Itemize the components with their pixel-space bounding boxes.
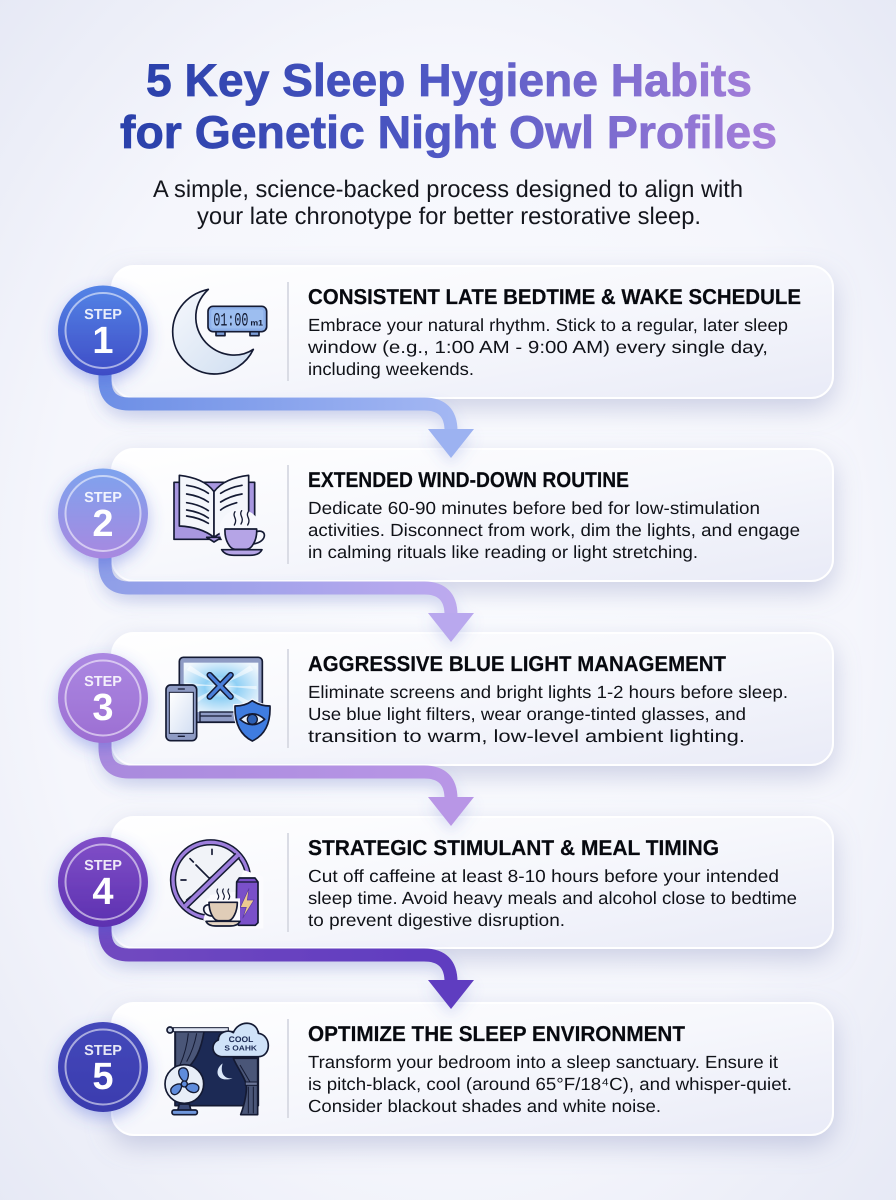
step 3 heading: AGGRESSIVE BLUE LIGHT MANAGEMENT <box>308 652 726 676</box>
panel: step 1 card <box>112 266 833 398</box>
step 4 description: to prevent digestive disruption. <box>308 910 565 930</box>
icon: bedroom window, fan and cool and dark cloud: COOL <box>229 1035 253 1044</box>
step 3 badge <box>58 653 148 743</box>
step 3 description <box>308 682 788 746</box>
step 2 description: in calming rituals like reading or light stretching. <box>308 542 698 562</box>
step 4 heading: STRATEGIC STIMULANT & MEAL TIMING <box>308 836 719 860</box>
arrow: step 3 to step 4 <box>105 737 474 826</box>
step 1 heading: CONSISTENT LATE BEDTIME & WAKE SCHEDULE <box>308 285 801 309</box>
step 5 description: is pitch-black, cool (around 65°F/18⁴C), and whisper-quiet. <box>308 1074 792 1094</box>
step 4 description: Cut off caffeine at least 8-10 hours before your intended <box>308 866 779 886</box>
step 1 badge: 1 <box>92 320 114 362</box>
step 1 description: window (e.g., 1:00 AM - 9:00 AM) every single day, <box>307 337 768 357</box>
step 4 badge: STEP <box>84 858 122 874</box>
step 3 description: Eliminate screens and bright lights 1-2 hours before sleep. <box>308 682 788 702</box>
step 5 description: Transform your bedroom into a sleep sanctuary. Ensure it <box>308 1052 778 1072</box>
subtitle <box>153 176 743 230</box>
step 1 badge <box>58 286 148 376</box>
step 5 heading: OPTIMIZE THE SLEEP ENVIRONMENT <box>308 1022 685 1046</box>
step 1 description <box>307 315 788 379</box>
step 2 description <box>308 498 800 562</box>
icon: bedroom window, fan and cool and dark cloud <box>165 1023 268 1115</box>
step 1 badge: STEP <box>84 307 122 323</box>
arrow: step 2 to step 3 <box>105 553 474 642</box>
step 5 description <box>308 1052 792 1116</box>
arrow: step 4 to step 5 <box>105 921 474 1009</box>
step 4 badge: 4 <box>92 871 114 913</box>
title: 5 Key Sleep Hygiene Habits <box>146 54 752 106</box>
arrow: step 1 to step 2 <box>105 370 474 458</box>
panel: step 2 card <box>112 449 833 581</box>
step 2 heading: EXTENDED WIND-DOWN ROUTINE <box>308 468 629 492</box>
step 4 badge <box>58 837 148 927</box>
icon: no late clock, coffee and energy drink <box>173 842 263 928</box>
icon: moon and alarm clock <box>173 289 267 374</box>
step 3 description: transition to warm, low-level ambient lighting. <box>308 726 745 746</box>
step 2 badge: STEP <box>84 490 122 506</box>
icon: moon and alarm clock: 01:00 <box>213 310 248 331</box>
step 1 description: Embrace your natural rhythm. Stick to a regular, later sleep <box>308 315 788 335</box>
title: for Genetic Night Owl Profiles <box>120 106 777 158</box>
step 5 badge <box>58 1022 148 1112</box>
step 5 badge: 5 <box>92 1056 114 1098</box>
panel: step 5 card <box>112 1003 833 1135</box>
icon: open book and tea cup <box>174 475 264 555</box>
step 3 description: Use blue light filters, wear orange-tinted glasses, and <box>308 704 746 724</box>
icon: moon and alarm clock: m1 <box>250 319 263 328</box>
panel: step 3 card <box>112 633 833 765</box>
subtitle: your late chronotype for better restorative sleep. <box>197 203 701 230</box>
step 3 badge: STEP <box>84 674 122 690</box>
step 2 badge: 2 <box>92 503 114 545</box>
icon: bedroom window, fan and cool and dark cloud: S OAHK <box>224 1044 257 1052</box>
title <box>120 54 777 158</box>
step 2 description: Dedicate 60-90 minutes before bed for low-stimulation <box>308 498 760 518</box>
panel: step 4 card <box>112 817 833 948</box>
icon: devices with blocked blue light <box>166 657 270 741</box>
step 5 description: Consider blackout shades and white noise. <box>308 1096 661 1116</box>
step 4 description: sleep time. Avoid heavy meals and alcohol close to bedtime <box>308 888 797 908</box>
subtitle: A simple, science-backed process designed to align with <box>153 176 743 203</box>
step 2 badge <box>58 468 148 558</box>
step 1 description: including weekends. <box>308 359 474 379</box>
step 3 badge: 3 <box>92 687 114 729</box>
step 4 description <box>308 866 797 930</box>
step 5 badge: STEP <box>84 1043 122 1059</box>
step 2 description: activities. Disconnect from work, dim the lights, and engage <box>308 520 800 540</box>
